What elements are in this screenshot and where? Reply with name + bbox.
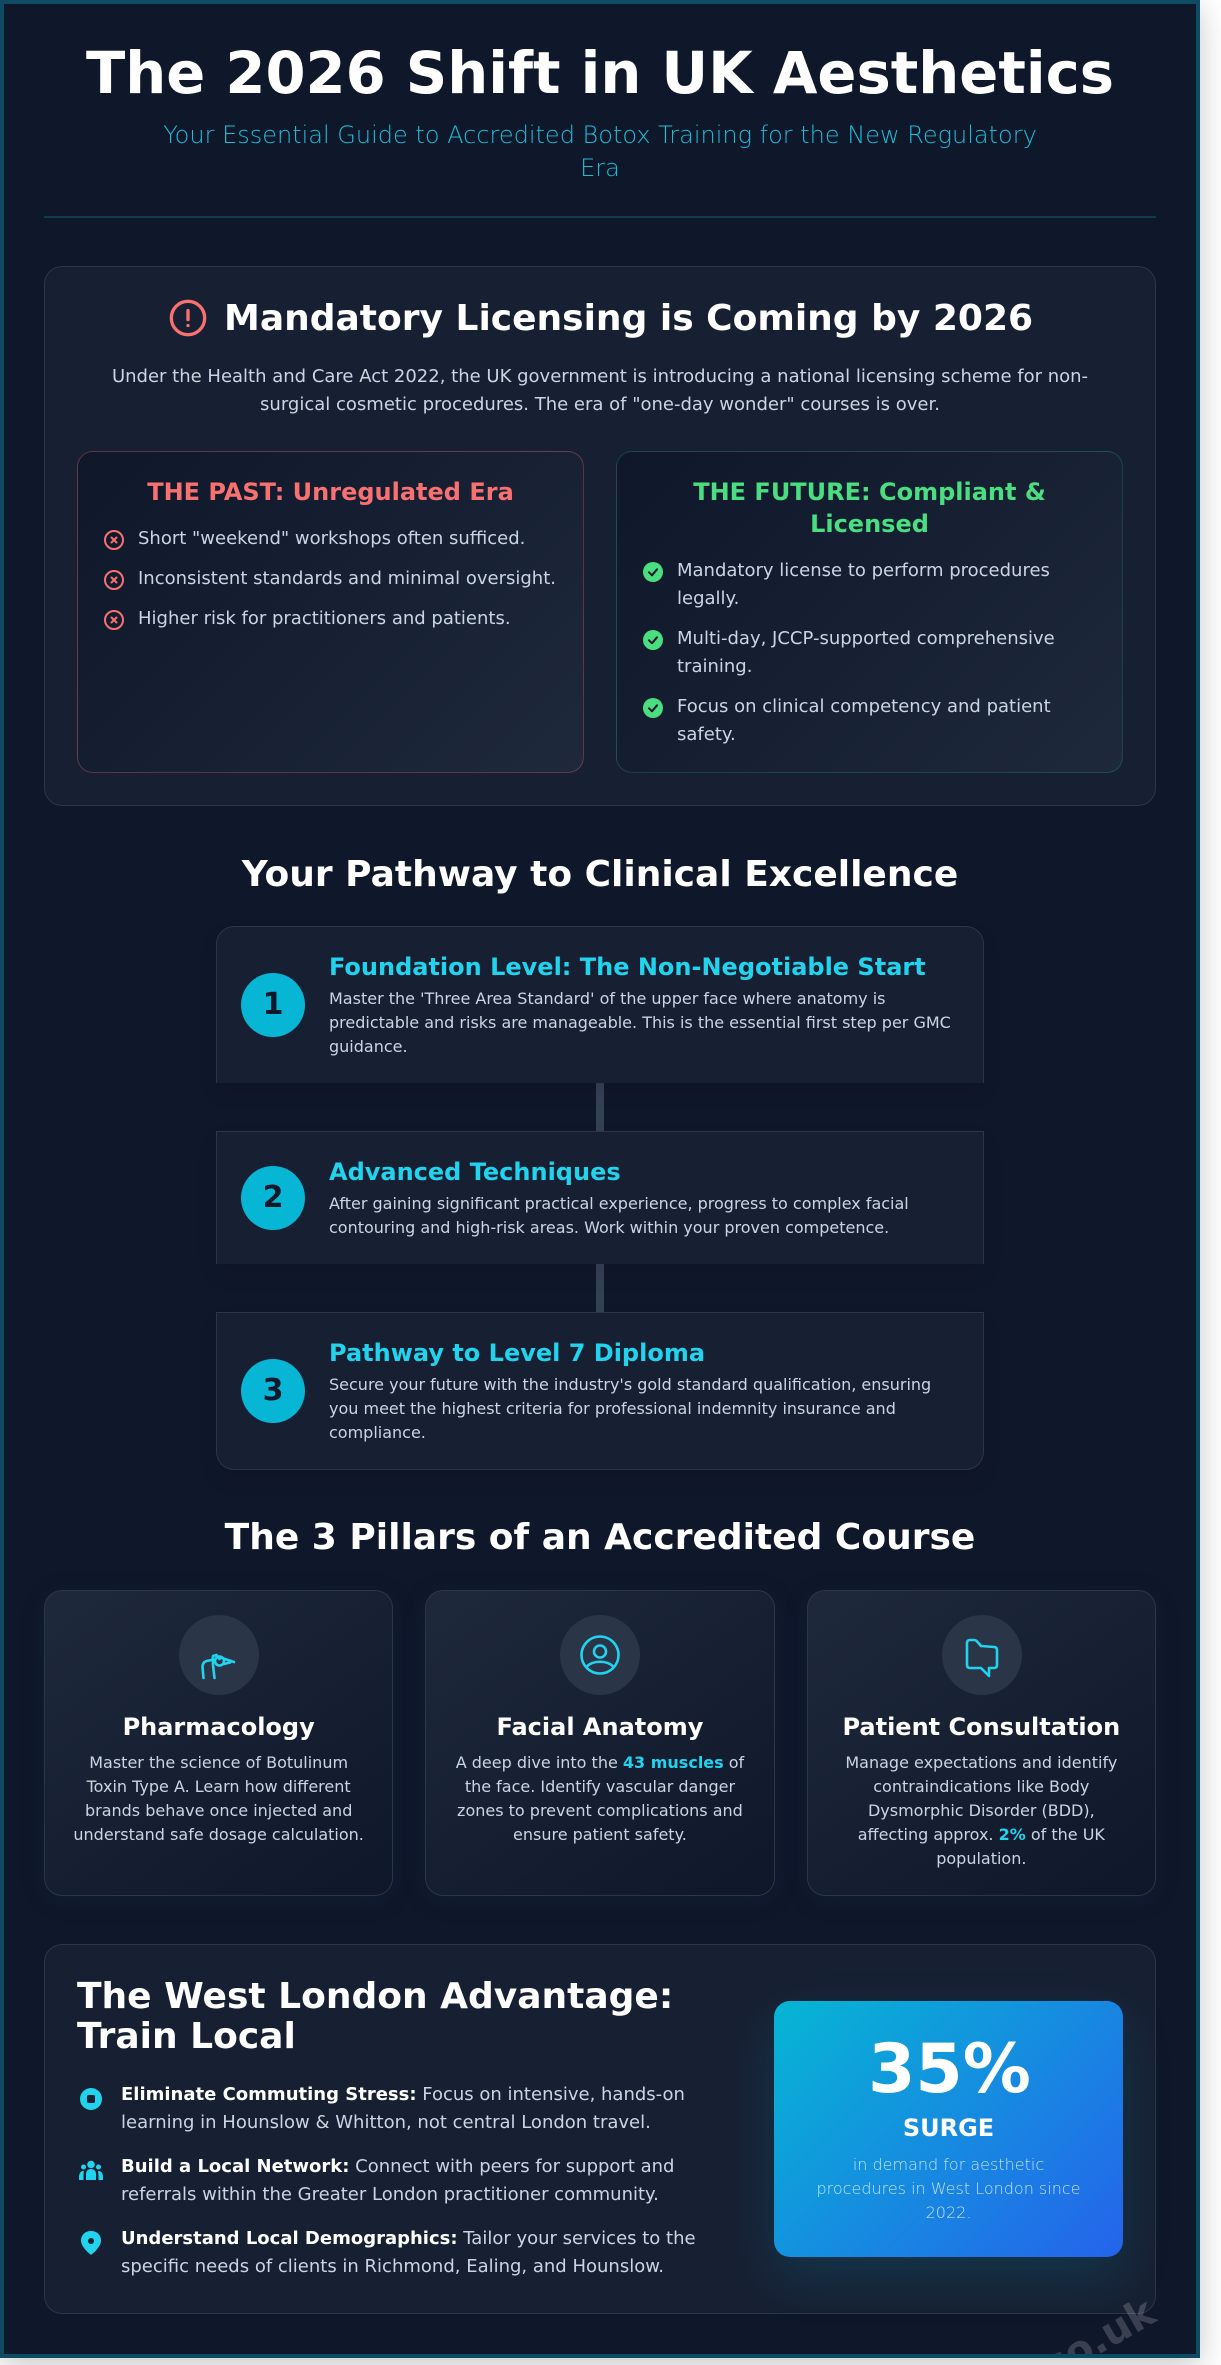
benefit: commuting: Eliminate Commuting Stress: Focus on intensive, hands-on xyxy=(121,2084,685,2105)
step 2 description: contouring and high-risk areas. Work within your proven competence. xyxy=(329,1218,889,1237)
pillar text: patient consultation: affecting approx. 2% of the UK xyxy=(858,1825,1105,1844)
icon: cross 3 xyxy=(104,610,124,630)
step 1 description: predictable and risks are manageable. This is the essential first step per GMC xyxy=(329,1013,951,1032)
stat number: 35% xyxy=(868,2030,1031,2109)
pillar: patient consultation xyxy=(807,1590,1156,1896)
pillar text: patient consultation: contraindications like Body xyxy=(873,1777,1089,1796)
pillar: pharmacology xyxy=(44,1590,393,1896)
stat description: in demand for aesthetic xyxy=(853,2154,1044,2174)
pillar text: patient consultation: population. xyxy=(936,1849,1026,1868)
heading: pillars: The 3 Pillars of an Accredited Course xyxy=(225,1517,975,1558)
pillar text: facial anatomy: the face. Identify vascular danger xyxy=(465,1777,735,1796)
pillar text: pharmacology: Master the science of Botulinum xyxy=(89,1753,348,1772)
heading: pathway: Your Pathway to Clinical Excellence xyxy=(242,854,958,895)
future item 2: Multi-day, JCCP-supported comprehensive xyxy=(677,628,1055,649)
step 1 xyxy=(216,926,984,1083)
icon: check 3 xyxy=(643,698,663,718)
intro text: Under the Health and Care Act 2022, the UK government is introducing a national licensing scheme for non- xyxy=(112,366,1088,387)
pillar text: patient consultation: Dysmorphic Disorder (BDD), xyxy=(868,1801,1095,1820)
panel: west london advantage xyxy=(44,1944,1156,2314)
benefit: network: referrals within the Greater London practitioner community. xyxy=(121,2184,659,2205)
connector 1 xyxy=(596,1082,604,1131)
future item 1 xyxy=(677,560,1050,609)
step 1 description: guidance. xyxy=(329,1037,408,1056)
stat card: 35% surge xyxy=(774,2001,1123,2257)
icon: location pin xyxy=(81,2231,101,2255)
heading: west london: Train Local xyxy=(77,2016,296,2057)
future item 2 xyxy=(677,628,1055,677)
pillar text: patient consultation xyxy=(845,1753,1117,1868)
past item 2: Inconsistent standards and minimal oversight. xyxy=(138,568,556,589)
step number 2 xyxy=(241,1166,305,1230)
heading: mandatory licensing: Mandatory Licensing is Coming by 2026 xyxy=(224,298,1033,339)
pillar text: patient consultation: Manage expectations and identify xyxy=(845,1753,1117,1772)
step number 3: 3 xyxy=(263,1373,283,1408)
icon: cross 1 xyxy=(104,530,124,550)
step 2 xyxy=(216,1131,984,1264)
icon: commuting xyxy=(80,2088,102,2110)
intro text: surgical cosmetic procedures. The era of "one-day wonder" courses is over. xyxy=(260,394,940,415)
icon: cross 2 xyxy=(104,570,124,590)
icon: network xyxy=(79,2160,103,2180)
heading: the future: Licensed xyxy=(810,510,929,538)
panel: the past xyxy=(77,451,584,773)
connector 2 xyxy=(596,1263,604,1312)
step 3 description: you meet the highest criteria for professional indemnity insurance and xyxy=(329,1399,896,1418)
pillar title: patient consultation: Patient Consultation xyxy=(842,1713,1120,1741)
step number 1: 1 xyxy=(263,987,283,1022)
step 2 title: Advanced Techniques xyxy=(329,1158,621,1186)
step 1 description: Master the 'Three Area Standard' of the upper face where anatomy is xyxy=(329,989,886,1008)
benefit: demographics: Understand Local Demographics: Tailor your services to the xyxy=(121,2228,696,2249)
past item 3: Higher risk for practitioners and patients. xyxy=(138,608,511,629)
benefit: commuting xyxy=(121,2084,685,2133)
benefit: demographics xyxy=(121,2228,696,2277)
future item 1: legally. xyxy=(677,588,739,609)
pillar text: pharmacology xyxy=(73,1753,364,1844)
pillar title: pharmacology: Pharmacology xyxy=(123,1713,315,1741)
heading: the future: THE FUTURE: Compliant & xyxy=(693,478,1046,506)
step 3 description xyxy=(329,1375,931,1442)
stat description xyxy=(816,2154,1080,2222)
past list xyxy=(104,528,556,630)
stat label: SURGE xyxy=(903,2114,994,2142)
icon: person xyxy=(560,1615,640,1695)
subtitle: Era xyxy=(580,154,620,182)
panel: mandatory licensing xyxy=(44,266,1156,806)
future item 2: training. xyxy=(677,656,752,677)
title: The 2026 Shift in UK Aesthetics xyxy=(86,40,1114,107)
pillar text: facial anatomy: A deep dive into the 43 muscles of xyxy=(456,1753,744,1772)
pillar text: facial anatomy: zones to prevent complications and xyxy=(457,1801,743,1820)
heading: the future xyxy=(693,478,1046,538)
stat description: 2022. xyxy=(926,2202,971,2222)
pillar: facial anatomy xyxy=(425,1590,775,1896)
step 3 description: Secure your future with the industry's gold standard qualification, ensuring xyxy=(329,1375,931,1394)
icon: check 2 xyxy=(643,630,663,650)
future item 3 xyxy=(677,696,1051,745)
subtitle xyxy=(163,121,1037,182)
pillar text: pharmacology: understand safe dosage calculation. xyxy=(73,1825,364,1844)
pillar text: pharmacology: brands behave once injected and xyxy=(85,1801,352,1820)
icon: check 1 xyxy=(643,562,663,582)
step number 3 xyxy=(241,1359,305,1423)
icon: speech folder xyxy=(942,1615,1022,1695)
future item 3: Focus on clinical competency and patient xyxy=(677,696,1051,717)
pillar text: facial anatomy: ensure patient safety. xyxy=(513,1825,687,1844)
step number 1 xyxy=(241,973,305,1037)
panel: the future xyxy=(616,451,1123,773)
pillar text: pharmacology: Toxin Type A. Learn how different xyxy=(87,1777,351,1796)
past item 1: Short "weekend" workshops often sufficed. xyxy=(138,528,525,549)
benefit: network xyxy=(121,2156,674,2205)
benefit: commuting: learning in Hounslow & Whitton, not central London travel. xyxy=(121,2112,651,2133)
benefit: demographics: specific needs of clients in Richmond, Ealing, and Hounslow. xyxy=(121,2256,664,2277)
future list xyxy=(643,560,1055,745)
step 1 description xyxy=(329,989,951,1056)
step 2 description: After gaining significant practical experience, progress to complex facial xyxy=(329,1194,909,1213)
future item 3: safety. xyxy=(677,724,736,745)
intro text xyxy=(112,366,1088,415)
step 3 xyxy=(216,1312,984,1470)
icon: warning circle xyxy=(170,300,206,336)
stat description: procedures in West London since xyxy=(816,2178,1080,2198)
step 1 title: Foundation Level: The Non-Negotiable Start xyxy=(329,953,926,981)
step 3 description: compliance. xyxy=(329,1423,426,1442)
heading: west london xyxy=(77,1976,673,2057)
heading: the past: THE PAST: Unregulated Era xyxy=(147,478,514,506)
step number 2: 2 xyxy=(263,1180,283,1215)
step 3 title: Pathway to Level 7 Diploma xyxy=(329,1339,705,1367)
icon: pharmacology xyxy=(179,1615,259,1695)
future item 1: Mandatory license to perform procedures xyxy=(677,560,1050,581)
benefit: network: Build a Local Network: Connect with peers for support and xyxy=(121,2156,674,2177)
subtitle: Your Essential Guide to Accredited Botox Training for the New Regulatory xyxy=(163,121,1037,149)
heading: west london: The West London Advantage: xyxy=(77,1976,673,2017)
pillar title: facial anatomy: Facial Anatomy xyxy=(496,1713,703,1741)
step 2 description xyxy=(329,1194,909,1237)
pillar text: facial anatomy xyxy=(456,1753,744,1844)
